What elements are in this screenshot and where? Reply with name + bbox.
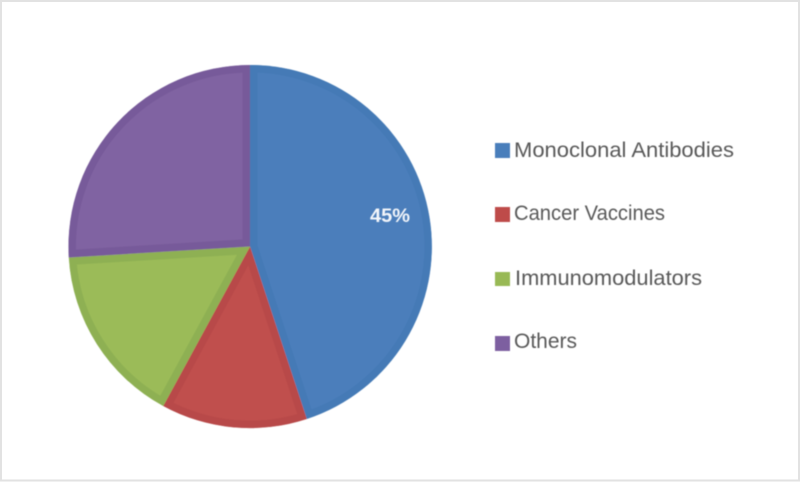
slice: Cancer Vaccines [163,246,307,428]
slice: Others [68,65,250,258]
legend item: Immunomodulators: Immunomodulators [515,267,702,290]
pie chart [68,65,432,428]
legend [495,139,734,353]
legend item: Cancer Vaccines: Cancer Vaccines [514,202,665,225]
slice: Monoclonal Antibodies 45% [250,65,432,419]
legend item: Monoclonal Antibodies: Monoclonal Antibodies [514,139,734,162]
legend item: Others: Others [514,330,577,353]
slice: Immunomodulators [69,246,250,406]
data label: 45%: 45% [370,206,410,227]
